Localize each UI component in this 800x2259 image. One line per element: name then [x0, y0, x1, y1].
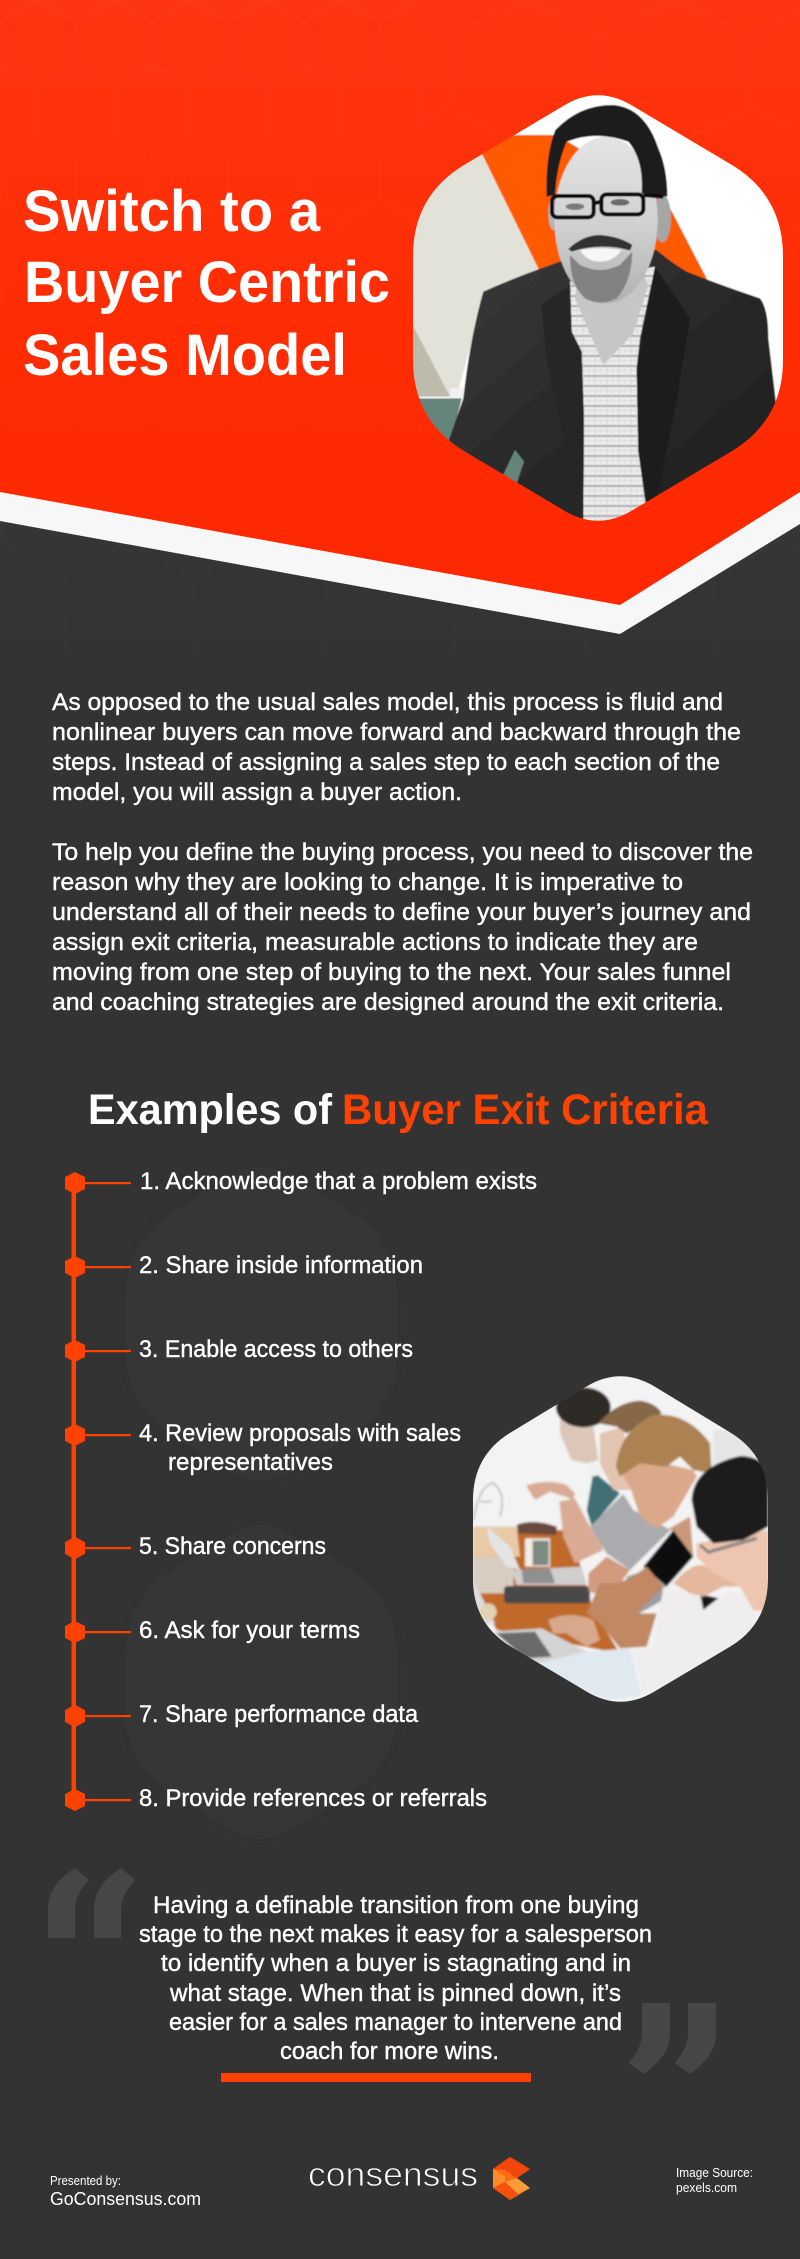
exit criteria list: 1. Acknowledge that a problem exists — [140, 1168, 537, 1195]
quote text: coach for more wins. — [280, 2038, 499, 2065]
footer: consensus logo — [308, 2156, 530, 2200]
body paragraph 1: As opposed to the usual sales model, this process is fluid and — [52, 689, 723, 716]
exit criteria list: 5. Share concerns — [139, 1533, 326, 1560]
header: dark texture band — [0, 521, 792, 554]
exit criteria list: 6. Ask for your terms — [139, 1617, 360, 1644]
body paragraph 2: understand all of their needs to define your buyer’s journey and — [52, 899, 751, 926]
body paragraph 2: To help you define the buying process, you need to discover the — [52, 839, 753, 866]
body paragraph 1: nonlinear buyers can move forward and backward through the — [52, 719, 741, 746]
quote text: to identify when a buyer is stagnating and in — [161, 1950, 631, 1977]
exit criteria list: 3. Enable access to others — [139, 1336, 413, 1363]
quote mark opening — [48, 1868, 135, 1938]
exit criteria list: 2. Share inside information — [139, 1252, 423, 1279]
quote text: Having a definable transition from one buying — [153, 1892, 639, 1919]
body paragraph 1: steps. Instead of assigning a sales step to each section of the — [52, 749, 720, 776]
exit criteria list: 4. Review proposals with sales — [139, 1420, 461, 1447]
quote underline bar — [221, 2073, 531, 2082]
quote text: easier for a sales manager to intervene and — [169, 2009, 622, 2036]
header: white slanted band — [0, 490, 800, 634]
quote text — [139, 1892, 652, 2065]
title: Switch to a — [23, 179, 321, 244]
title: Sales Model — [23, 323, 347, 388]
team photo in hexagon — [473, 1376, 768, 1702]
body paragraph 2 — [52, 839, 753, 1016]
footer: consensus logo: consensus — [308, 2156, 478, 2194]
title: Buyer Centric — [24, 250, 390, 315]
exit criteria list: representatives — [168, 1449, 333, 1476]
title — [23, 179, 390, 388]
body paragraph 2: and coaching strategies are designed around the exit criteria. — [52, 989, 724, 1016]
heading: examples of buyer exit criteria: Examples of — [88, 1086, 333, 1134]
body paragraph 2: assign exit criteria, measurable actions to indicate they are — [52, 929, 698, 956]
quote text: stage to the next makes it easy for a salesperson — [139, 1921, 652, 1948]
quote text: what stage. When that is pinned down, it’s — [169, 1980, 621, 2007]
body paragraph 1: model, you will assign a buyer action. — [52, 779, 462, 806]
body paragraph 2: moving from one step of buying to the next. Your sales funnel — [52, 959, 731, 986]
footer: presented by: Presented by: — [50, 2173, 121, 2188]
body paragraph 2: reason why they are looking to change. It is imperative to — [52, 869, 683, 896]
exit criteria list — [139, 1168, 537, 1812]
footer: presented by — [50, 2173, 201, 2209]
footer: image source: pexels.com — [676, 2180, 737, 2195]
footer: image source — [676, 2165, 753, 2195]
header: red chevron panel — [0, 0, 800, 605]
footer: presented by: GoConsensus.com — [50, 2189, 201, 2209]
quote mark closing — [629, 2003, 716, 2074]
body paragraph 1 — [52, 689, 741, 806]
exit criteria list: 8. Provide references or referrals — [139, 1785, 487, 1812]
footer: image source: Image Source: — [676, 2165, 753, 2180]
exit criteria list: 7. Share performance data — [139, 1701, 419, 1728]
heading: examples of buyer exit criteria — [88, 1086, 709, 1134]
timeline spine and nodes — [65, 1172, 131, 1811]
background hexagon lower — [125, 1525, 398, 1839]
heading: examples of buyer exit criteria: Buyer Exit Criteria — [342, 1086, 709, 1134]
background hexagon upper — [125, 1167, 398, 1481]
portrait photo in hexagon — [413, 95, 783, 521]
